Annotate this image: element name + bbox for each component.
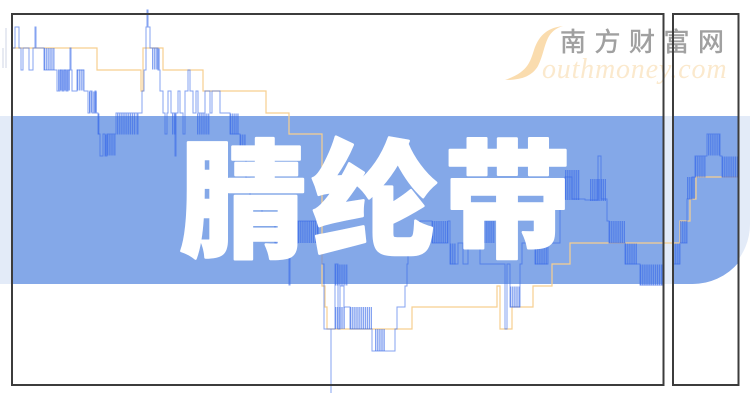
logo Chinese name: 南方财富网 — [560, 27, 733, 57]
logo domain: outhmoney.com — [542, 54, 727, 85]
chart frame right — [673, 14, 738, 385]
faint ghost ticks — [3, 24, 12, 68]
banner band — [12, 116, 739, 284]
dense trading blocks — [44, 59, 738, 340]
title: 腈纶带 — [179, 132, 577, 274]
icon: logo swoosh S — [505, 26, 563, 80]
banner band outer tint — [0, 116, 750, 284]
orange step line — [12, 48, 738, 329]
logo: southmoney — [505, 26, 733, 85]
